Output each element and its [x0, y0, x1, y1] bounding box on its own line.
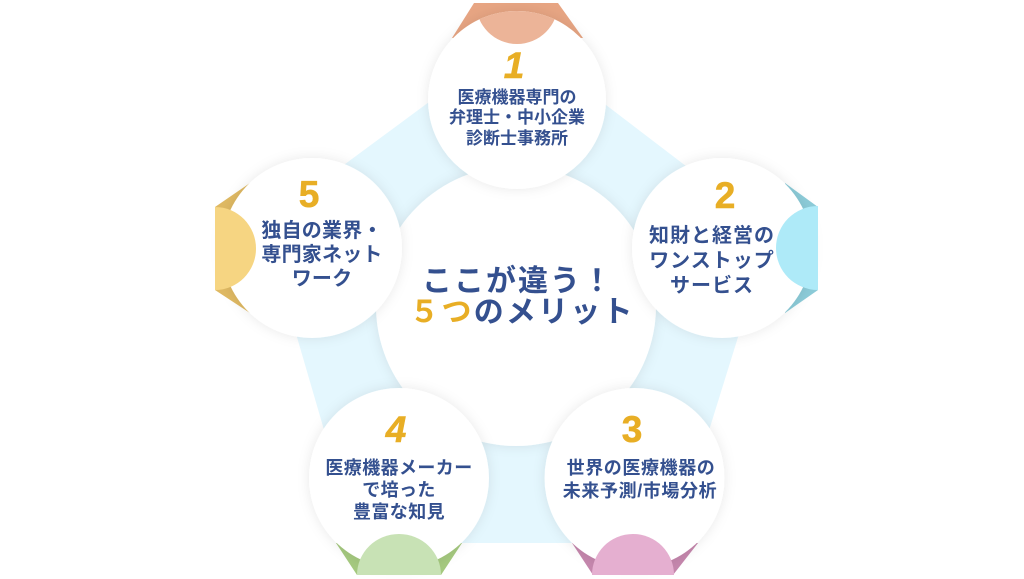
- semicircle 2: [776, 206, 818, 290]
- item 2: [632, 158, 818, 338]
- text 5: 専門家ネット: [261, 243, 383, 266]
- text 1: 診断士事務所: [466, 129, 568, 148]
- text 1: 弁理士・中小企業: [449, 107, 585, 127]
- circle 5: [222, 158, 402, 338]
- circle 1: [428, 11, 606, 189]
- center heading: [409, 264, 635, 329]
- text 5: ワーク: [292, 267, 352, 290]
- text 5: 独自の業界・: [261, 219, 383, 242]
- text 4: 医療機器メーカー: [325, 458, 473, 478]
- center circle: [376, 166, 656, 446]
- text 3: 未来予測/市場分析: [563, 481, 717, 501]
- text 2: 知財と経営の: [649, 224, 775, 247]
- item 3: [544, 388, 724, 575]
- semicircle 5: [215, 207, 256, 290]
- text 3: [563, 458, 717, 501]
- text 2: ワンストップ: [649, 249, 775, 272]
- semicircle 4: [357, 534, 441, 575]
- number 5: 5: [299, 174, 319, 215]
- circle 2: [632, 158, 812, 338]
- text 4: [325, 458, 473, 522]
- text 5: [261, 219, 383, 290]
- circle 3: [544, 388, 724, 568]
- ribbon 1: [452, 3, 583, 38]
- number 3: 3: [622, 409, 642, 450]
- text 2: サービス: [670, 274, 754, 297]
- center heading: ５つのメリット: [409, 296, 635, 329]
- item 1: [428, 0, 606, 189]
- text 3: 世界の医療機器の: [567, 458, 715, 478]
- text 2: [649, 224, 775, 297]
- ribbon 3: [572, 543, 698, 575]
- number 1: 1: [504, 45, 524, 86]
- ribbon 2: [785, 183, 818, 313]
- number 2: 2: [715, 175, 735, 216]
- number 4: 4: [385, 409, 406, 450]
- ribbon 4: [336, 543, 462, 575]
- circle 4: [309, 388, 489, 568]
- item 4: [309, 388, 489, 575]
- text 1: 医療機器専門の: [458, 88, 576, 107]
- text 1: [449, 88, 585, 148]
- background pentagon: [264, 37, 771, 543]
- center heading: ここが違う！: [422, 264, 614, 298]
- text 4: で培った: [362, 480, 436, 500]
- ribbon 5: [215, 183, 250, 313]
- semicircle 3: [592, 534, 674, 575]
- item 5: [215, 158, 402, 338]
- text 4: 豊富な知見: [353, 502, 445, 522]
- semicircle 1: [480, 11, 554, 44]
